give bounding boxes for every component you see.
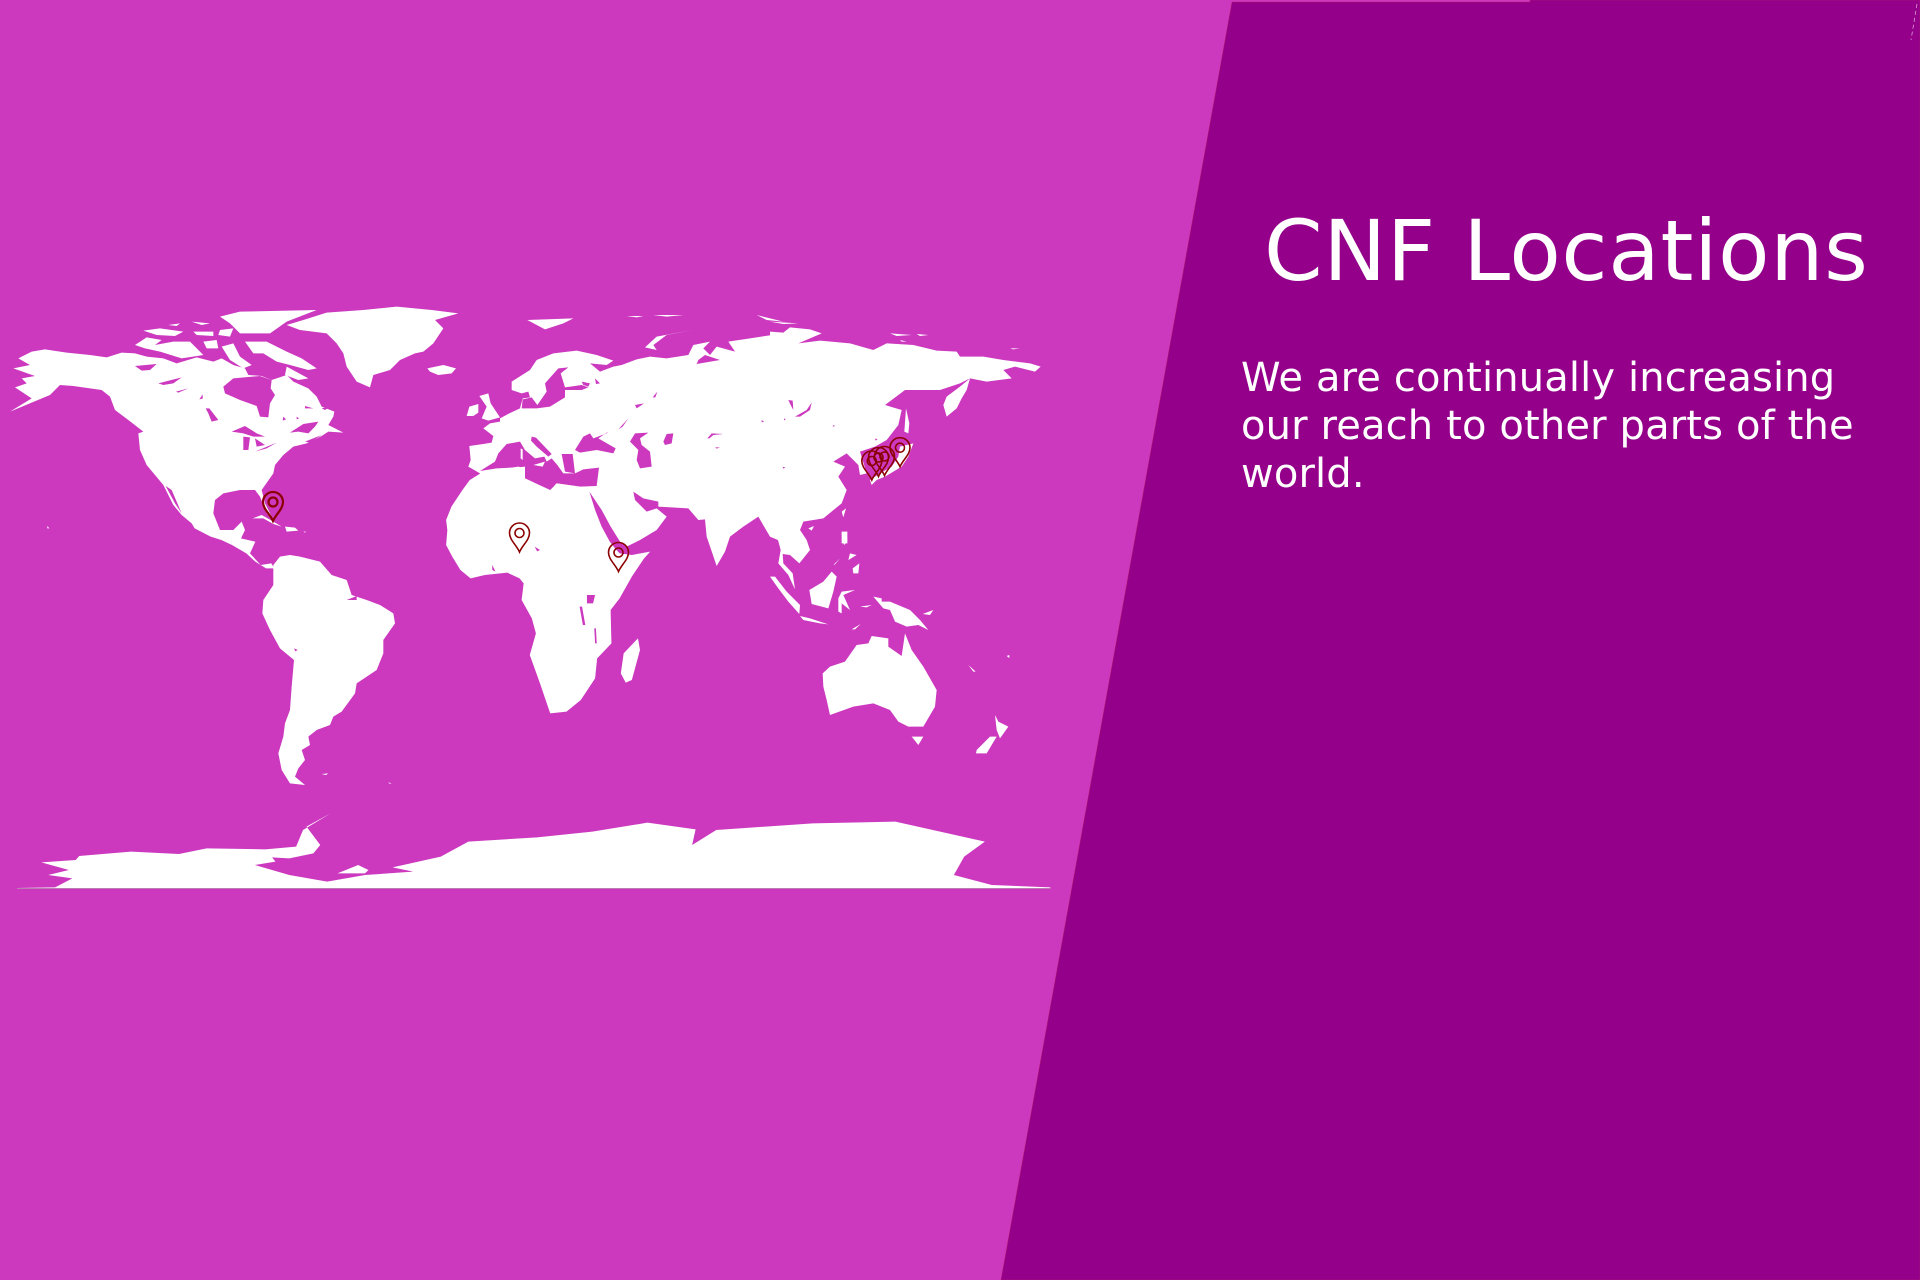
icon: pin Japan 4 bbox=[890, 438, 910, 467]
icon: pin Japan 3 bbox=[874, 446, 894, 476]
text block: description: world. bbox=[1241, 451, 1365, 497]
icon: pin West Africa bbox=[510, 523, 530, 552]
world map bbox=[10, 307, 1050, 889]
icon: pin Japan 1 bbox=[862, 451, 882, 480]
map: North America bbox=[10, 310, 343, 568]
map: East Asia bbox=[770, 322, 1041, 550]
map: Southeast Asia and Oceania bbox=[770, 527, 1009, 753]
map: Greenland and Iceland bbox=[287, 307, 458, 387]
map: Antarctica bbox=[17, 813, 1050, 889]
map: African lakes bbox=[492, 547, 597, 643]
text block: description: We are continually increasing bbox=[1241, 355, 1835, 401]
panel: dark slanted right panel bbox=[1001, 0, 1920, 1280]
map: Hudson Bay, lakes and gulfs bbox=[135, 364, 330, 513]
map: Europe and western Asia bbox=[467, 315, 790, 566]
text block: description: our reach to other parts of the bbox=[1241, 403, 1854, 449]
icon: pin East Africa bbox=[608, 542, 628, 572]
title: CNF Locations bbox=[1264, 202, 1869, 300]
map: South America bbox=[262, 555, 395, 785]
map: Lake Baikal and Asian lakes bbox=[783, 400, 878, 469]
icon: pin Japan 2 bbox=[868, 448, 888, 476]
map pins bbox=[263, 438, 910, 572]
text block: description bbox=[1241, 355, 1854, 497]
map: Africa and Madagascar bbox=[446, 467, 650, 713]
map: Mediterranean, Baltic and inland seas bbox=[480, 355, 764, 490]
icon: pin Florida bbox=[263, 492, 283, 521]
